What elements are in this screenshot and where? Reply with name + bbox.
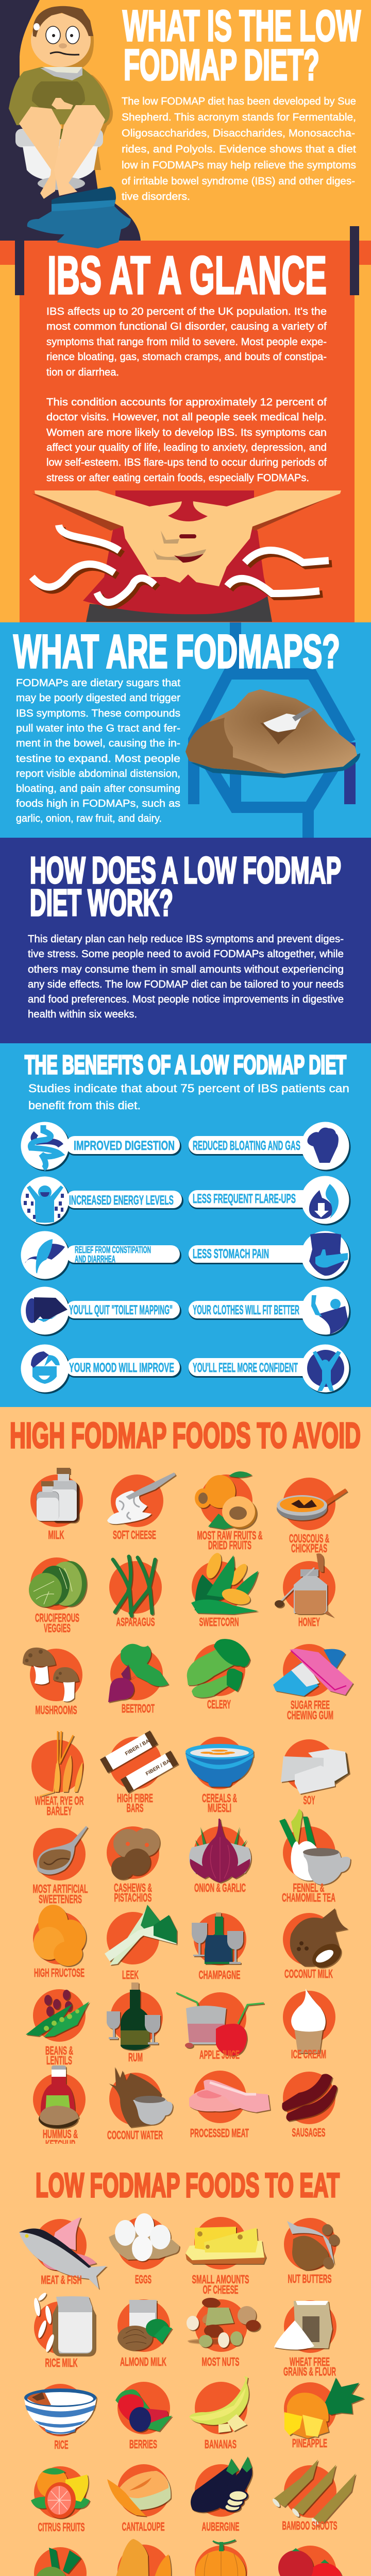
panel: high FODMAP foods to avoid — [0, 1407, 371, 2151]
food: pineapple — [284, 2378, 364, 2450]
food: most nuts — [187, 2298, 260, 2368]
benefit: increased energy levels — [21, 1177, 183, 1226]
food: wheat, rye or barley — [31, 1731, 84, 1818]
food: fennel and chamomile tea: FENNEL & — [293, 1881, 325, 1894]
text block: how it works: any side effects. The low FODMAP diet can be tailored to your needs — [28, 979, 344, 990]
food: high fructose: HIGH FRUCTOSE — [34, 1966, 85, 1979]
text block: FODMAPs: testine to expand. Most people — [16, 753, 180, 765]
icon: dropped blue trousers — [27, 187, 131, 248]
food: most artificial sweeteners — [33, 1826, 88, 1906]
text block: IBS paragraph 1 — [46, 306, 327, 378]
food: aubergine — [191, 2456, 252, 2533]
text block: benefits intro — [28, 1082, 349, 1112]
food: sausages — [282, 2072, 337, 2139]
food: cantaloupe — [107, 2464, 171, 2533]
text block: IBS paragraph 2: low self-esteem. IBS flare-ups tend to occur during periods of — [46, 457, 327, 468]
benefit: reduced bloating and gas — [189, 1122, 350, 1172]
illustration: person with irritated gut — [32, 490, 341, 622]
food: ice cream — [283, 1989, 335, 2061]
food: asparagus: ASPARAGUS — [116, 1615, 155, 1629]
food: butternut squash — [114, 2539, 171, 2576]
text block: how it works — [28, 934, 344, 1020]
food: nut butters — [284, 2218, 339, 2285]
food: rum: RUM — [128, 2050, 143, 2064]
text block: FODMAPs: bloating, and pain after consuming — [16, 783, 180, 794]
panel: how does a low FODMAP diet work — [0, 838, 371, 1043]
food: fennel and chamomile tea — [279, 1809, 350, 1904]
food: sugar free chewing gum: SUGAR FREE — [291, 1698, 330, 1711]
food: champagne — [192, 1912, 246, 1981]
text block: IBS paragraph 1: symptoms that range from mild to severe. Most people expe- — [46, 336, 327, 348]
food: cantaloupe: CANTALOUPE — [122, 2520, 165, 2533]
food: asparagus — [109, 1556, 162, 1629]
food: leafy green vegetables — [34, 2547, 87, 2576]
text block: intro: tive disorders. — [122, 191, 190, 202]
food: rice: RICE — [55, 2438, 68, 2451]
panel: IBS at a glance — [0, 187, 371, 622]
panel: benefits — [0, 1043, 371, 1407]
food: rum — [107, 1982, 163, 2064]
benefit: quit toilet mapping: YOU'LL QUIT "TOILET MAPPING" — [69, 1303, 173, 1317]
food: soft cheese — [107, 1472, 176, 1541]
food: eggs — [109, 2213, 179, 2286]
food: cashews and pistachios — [107, 1826, 160, 1904]
text block: benefits intro: Studies indicate that about 75 percent of IBS patients can — [28, 1082, 349, 1095]
food: high fructose — [33, 1905, 86, 1979]
food: hummus and ketchup: HUMMUS & — [43, 2127, 78, 2141]
food: berries — [115, 2382, 172, 2451]
food: sweetcorn: SWEETCORN — [199, 1615, 239, 1629]
food: eggs: EGGS — [135, 2273, 151, 2286]
text block: IBS paragraph 2: stress or after eating certain foods, especially FODMAPs. — [46, 472, 309, 484]
food: bananas — [189, 2376, 249, 2451]
food: couscous and chickpeas: COUSCOUS & — [289, 1532, 329, 1545]
food: pumpkin — [195, 2540, 247, 2576]
food: small amounts of cheese: SMALL AMOUNTS — [192, 2273, 249, 2286]
food: citrus fruits: CITRUS FRUITS — [38, 2520, 85, 2534]
food: high fibre bars: BARS — [127, 1801, 143, 1815]
food: celery: CELERY — [207, 1698, 231, 1711]
benefit: less stomach pain: LESS STOMACH PAIN — [193, 1247, 269, 1261]
icon: toilet outline backdrop — [194, 622, 350, 838]
food: citrus fruits — [31, 2466, 90, 2534]
food: most raw fruits and dried fruits — [195, 1471, 263, 1552]
food: soy — [281, 1739, 349, 1807]
food: processed meat: PROCESSED MEAT — [190, 2126, 249, 2140]
panel: low FODMAP foods to eat — [0, 2144, 371, 2576]
food: high fibre bars: HIGH FIBRE — [117, 1791, 153, 1805]
food: apple juice — [176, 1992, 264, 2061]
title — [123, 2, 361, 89]
food: high fibre bars: FIBER / BAR — [124, 1736, 154, 1757]
food: tomatoes — [278, 2546, 343, 2576]
food: leek: LEEK — [122, 1968, 139, 1981]
food: most artificial sweeteners: MOST ARTIFICIAL — [33, 1882, 88, 1895]
food: cashews and pistachios: PISTACHIOS — [114, 1891, 151, 1904]
food: milk: MILK — [48, 1528, 64, 1541]
benefit: mood will improve: YOUR MOOD WILL IMPROVE — [69, 1361, 174, 1375]
text block: how it works: others may consume them in small amounts without experiencing — [28, 964, 344, 975]
food: most nuts: MOST NUTS — [202, 2355, 239, 2368]
text block: IBS paragraph 2: Women are more likely to develop IBS. Its symptoms can — [46, 427, 327, 438]
text block: how it works: health within six weeks. — [28, 1009, 137, 1020]
text block: benefits intro: benefit from this diet. — [28, 1099, 141, 1112]
food: sweetcorn — [191, 1551, 258, 1629]
food: wheat free grains and flour: WHEAT FREE — [290, 2355, 330, 2368]
text block: intro — [122, 96, 356, 202]
text block: intro: Oligosaccharides, Disaccharides, Monosaccha- — [122, 128, 355, 139]
text block: FODMAPs: FODMAPs are dietary sugars that — [16, 677, 180, 689]
food: milk — [30, 1468, 83, 1541]
food: wheat free grains and flour — [274, 2300, 336, 2378]
benefit: feel more confident — [189, 1345, 350, 1394]
text block: how it works: and food preferences. Most people notice improvements in digestive — [28, 994, 344, 1005]
benefit: mood will improve — [21, 1345, 181, 1394]
text block: intro: The low FODMAP diet has been developed by Sue — [122, 96, 356, 107]
food: sugar free chewing gum — [273, 1644, 353, 1722]
food: small amounts of cheese: OF CHEESE — [203, 2283, 238, 2296]
food: beans and lentils: LENTILS — [46, 2054, 72, 2067]
text block: FODMAPs: report visible abdominal distension, — [16, 768, 180, 779]
text block: FODMAPs: pull water into the G tract and fer- — [16, 723, 180, 734]
food: cruciferous veggies: VEGGIES — [44, 1621, 71, 1635]
food: meat and fish — [19, 2217, 107, 2289]
text block: FODMAPs: IBS symptoms. These compounds — [16, 708, 180, 719]
food: high fibre bars: FIBER / BAR — [145, 1756, 175, 1777]
text block: IBS paragraph 2: affect your quality of life, leading to anxiety, depression, and — [46, 442, 327, 453]
text block: IBS paragraph 1: rience bloating, gas, stomach cramps, and bouts of constipa- — [46, 351, 327, 363]
text block: intro: of irritable bowel syndrome (IBS) and other diges- — [122, 176, 355, 187]
heading — [30, 850, 341, 924]
food: onion and garlic — [189, 1819, 251, 1894]
gut squiggle shadows — [35, 528, 332, 605]
food: beetroot: BEETROOT — [122, 1702, 155, 1715]
food: small amounts of cheese — [185, 2217, 266, 2296]
text block: how it works: This dietary plan can help reduce IBS symptoms and prevent diges- — [28, 934, 344, 945]
text block: IBS paragraph 1: tion or diarrhea. — [46, 367, 119, 378]
food: processed meat — [189, 2071, 270, 2140]
text block: FODMAPs — [16, 677, 180, 824]
food: almond milk — [117, 2299, 172, 2368]
food: coconut milk — [283, 1908, 348, 1980]
food: aubergine: AUBERGINE — [202, 2520, 239, 2533]
food: honey: HONEY — [298, 1615, 320, 1629]
text block: FODMAPs: ment in the bowel, causing the in- — [16, 738, 180, 749]
benefit: improved digestion: IMPROVED DIGESTION — [74, 1139, 175, 1153]
food: cereals and muesli: MUESLI — [208, 1801, 231, 1815]
text block: IBS paragraph 2 — [46, 397, 327, 484]
text block: how it works: tive stress. Some people need to avoid FODMAPs altogether, while — [28, 948, 344, 960]
food: most raw fruits and dried fruits: MOST RAW FRUITS & — [197, 1529, 263, 1542]
food: leek — [105, 1905, 177, 1981]
food: most raw fruits and dried fruits: DRIED FRUITS — [208, 1538, 251, 1552]
text block: FODMAPs: may be poorly digested and trigger — [16, 692, 180, 704]
text block: intro: low in FODMAPs may help relieve the symptoms — [122, 160, 356, 171]
text block: IBS paragraph 1: IBS affects up to 20 percent of the UK population. It's the — [46, 306, 327, 317]
food: mushrooms — [23, 1648, 82, 1717]
benefit: increased energy levels: INCREASED ENERGY LEVELS — [69, 1193, 174, 1208]
food: rice — [24, 2384, 96, 2451]
food: cruciferous veggies — [29, 1557, 87, 1635]
food: cashews and pistachios: CASHEWS & — [114, 1881, 152, 1894]
food: beans and lentils — [26, 1989, 89, 2067]
food: berries: BERRIES — [129, 2437, 157, 2451]
text block: intro: rides, and Polyols. Evidence shows that a diet — [122, 144, 356, 155]
food: bamboo shoots — [272, 2460, 356, 2532]
food: hummus and ketchup: KETCHUP — [45, 2138, 75, 2151]
food: nut butters: NUT BUTTERS — [288, 2272, 332, 2285]
food: sausages: SAUSAGES — [292, 2126, 326, 2139]
food: cruciferous veggies: CRUCIFEROUS — [35, 1611, 79, 1624]
heading: DIET WORK? — [30, 883, 173, 924]
food: pineapple: PINEAPPLE — [292, 2436, 327, 2450]
text block: IBS paragraph 1: most common functional GI disorder, causing a variety of — [46, 321, 327, 332]
benefit: improved digestion — [21, 1122, 181, 1172]
food: ice cream: ICE CREAM — [291, 2047, 326, 2061]
benefit: relief from constipation and diarrhea: RELIEF FROM CONSTIPATION — [75, 1245, 151, 1255]
food: high fibre bars — [100, 1731, 178, 1815]
panel: what is the low FODMAP diet — [0, 0, 371, 241]
food: almond milk: ALMOND MILK — [120, 2355, 166, 2368]
food: beetroot — [108, 1644, 168, 1715]
food: onion and garlic: ONION & GARLIC — [194, 1881, 246, 1894]
text block: IBS paragraph 2: doctor visits. However, not all people seek medical help. — [46, 412, 327, 423]
benefit: quit toilet mapping — [21, 1287, 181, 1336]
food: wheat, rye or barley: BARLEY — [46, 1804, 72, 1818]
food: honey — [275, 1553, 335, 1629]
food: cereals and muesli: CEREALS & — [202, 1791, 237, 1805]
food: wheat, rye or barley: WHEAT, RYE OR — [35, 1794, 84, 1807]
benefit: less frequent flare-ups — [189, 1176, 350, 1225]
text block: intro: Shepherd. This acronym stands for Fermentable, — [122, 112, 356, 123]
food: hummus and ketchup — [33, 2065, 86, 2151]
illustration: stool with shovel — [185, 689, 360, 778]
food: most artificial sweeteners: SWEETENERS — [39, 1892, 82, 1906]
food: meat and fish: MEAT & FISH — [41, 2273, 81, 2286]
food: cereals and muesli — [185, 1737, 254, 1815]
gut squiggles — [32, 525, 329, 602]
benefit: relief from constipation and diarrhea — [21, 1231, 181, 1281]
benefit: less stomach pain — [189, 1231, 350, 1281]
food: rice milk: RICE MILK — [45, 2356, 78, 2369]
dark curtain backdrop — [0, 0, 141, 241]
illustration: man on toilet — [8, 6, 113, 199]
text block: FODMAPs: garlic, onion, raw fruit, and dairy. — [16, 813, 162, 824]
text block: FODMAPs: foods high in FODMAPs, such as — [16, 798, 180, 809]
food: coconut water — [107, 2067, 173, 2142]
food: bananas: BANANAS — [205, 2437, 237, 2451]
food: rice milk — [33, 2292, 95, 2369]
food: coconut water: COCONUT WATER — [107, 2128, 163, 2142]
text block: IBS paragraph 2: This condition accounts for approximately 12 percent of — [46, 397, 327, 408]
food: soft cheese: SOFT CHEESE — [113, 1528, 156, 1541]
food: couscous and chickpeas: CHICKPEAS — [291, 1541, 327, 1555]
food: apple juice: APPLE JUICE — [199, 2048, 240, 2061]
food: celery — [187, 1639, 250, 1711]
food: champagne: CHAMPAGNE — [199, 1968, 240, 1981]
food: mushrooms: MUSHROOMS — [35, 1703, 77, 1717]
benefit: relief from constipation and diarrhea: AND DIARRHEA — [75, 1254, 115, 1264]
benefit: clothes fit better — [189, 1287, 350, 1336]
food: beans and lentils: BEANS & — [45, 2044, 73, 2057]
food: couscous and chickpeas — [277, 1478, 347, 1555]
food: soy: SOY — [303, 1793, 315, 1807]
panel: what are FODMAPs — [0, 622, 371, 838]
